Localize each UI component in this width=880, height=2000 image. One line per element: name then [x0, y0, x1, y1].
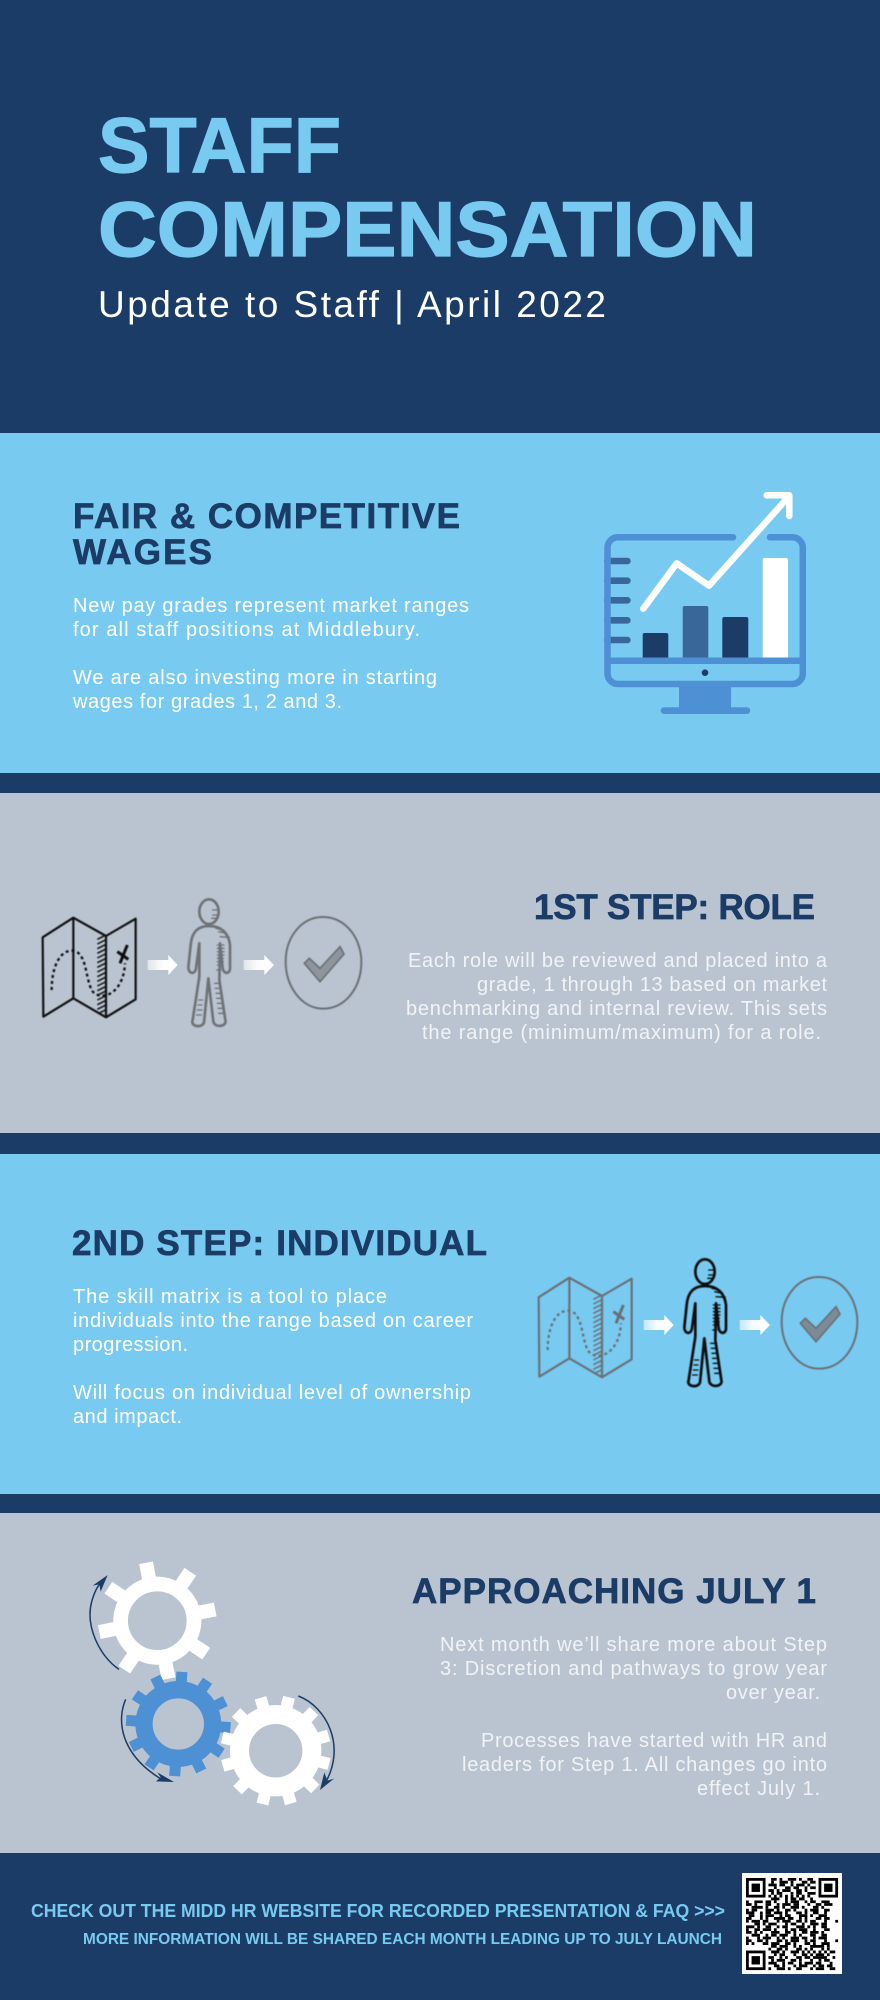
gear: middle blue — [126, 1671, 231, 1777]
panel: fair and competitive wages — [0, 433, 880, 773]
text block: next steps: Processes have started with HR and — [481, 1730, 827, 1752]
text block: pay grades: wages for grades 1, 2 and 3. — [72, 691, 342, 713]
icon: three gears — [90, 1561, 334, 1806]
text block: role review: grade, 1 through 13 based on market — [477, 974, 827, 996]
icon sequence: map, person, check — [539, 1259, 857, 1386]
text block: role review: the range (minimum/maximum) for a role. — [422, 1022, 821, 1044]
text block: role review: benchmarking and internal review. This sets — [406, 998, 827, 1020]
text block: skill matrix: and impact. — [73, 1406, 182, 1428]
heading: fair and competitive wages: FAIR & COMPETITIVE — [73, 497, 460, 536]
text block: pay grades: New pay grades represent market ranges — [73, 595, 469, 617]
icon: person outline — [188, 899, 230, 1026]
heading: fair and competitive wages — [73, 497, 460, 572]
arrows: gear rotation — [90, 1575, 334, 1790]
icon: treasure map — [43, 918, 136, 1017]
arrow: person to check — [740, 1315, 770, 1335]
text block: next steps: 3: Discretion and pathways to grow year — [440, 1658, 827, 1680]
text block: next steps: over year. — [726, 1682, 820, 1704]
text block: next steps — [440, 1634, 827, 1800]
panel: approaching july 1 — [0, 1513, 880, 1853]
icon: monitor with rising chart — [604, 495, 803, 714]
text block: next steps: effect July 1. — [697, 1778, 820, 1800]
arrow: person to check — [244, 955, 274, 975]
text block: skill matrix: The skill matrix is a tool to place — [73, 1286, 387, 1308]
callout: monthly information: MORE INFORMATION WILL BE SHARED EACH MONTH LEADING UP TO JULY LAUNCH — [83, 1931, 722, 1948]
panel: title header — [98, 101, 757, 325]
callout: website link: CHECK OUT THE MIDD HR WEBSITE FOR RECORDED PRESENTATION & FAQ >>> — [31, 1901, 725, 1921]
text block: next steps: Next month we’ll share more about Step — [440, 1634, 827, 1656]
text block: role review — [406, 950, 828, 1044]
icon: person outline — [684, 1259, 726, 1386]
text block: role review: Each role will be reviewed and placed into a — [408, 950, 828, 972]
arrow: map to person — [644, 1315, 674, 1335]
text block: pay grades: We are also investing more in starting — [73, 667, 437, 689]
text block: pay grades: for all staff positions at Middlebury. — [73, 619, 420, 641]
icon: QR code — [742, 1873, 842, 1974]
text block: skill matrix: progression. — [73, 1334, 188, 1356]
subtitle: Update to Staff | April 2022 — [98, 284, 606, 325]
heading: approaching july 1: APPROACHING JULY 1 — [412, 1572, 816, 1611]
arrow: map to person — [148, 955, 178, 975]
text block: skill matrix: individuals into the range based on career — [73, 1310, 473, 1332]
icon sequence: map, person, check — [43, 899, 361, 1026]
icon: treasure map — [539, 1278, 632, 1377]
icon: check mark in circle — [286, 917, 361, 1009]
gear: top white — [98, 1561, 217, 1680]
heading: 1st step role: 1ST STEP: ROLE — [534, 888, 815, 927]
title: COMPENSATION — [98, 185, 757, 273]
panel: footer — [31, 1873, 842, 1974]
heading: fair and competitive wages: WAGES — [73, 533, 212, 572]
text block: skill matrix: Will focus on individual level of ownership — [73, 1382, 471, 1404]
heading: 2nd step individual: 2ND STEP: INDIVIDUAL — [72, 1224, 487, 1263]
title: STAFF — [98, 101, 341, 189]
gear: right white — [221, 1696, 331, 1806]
icon: check mark in circle — [782, 1277, 857, 1369]
text block: next steps: leaders for Step 1. All changes go into — [462, 1754, 827, 1776]
text block: pay grades — [72, 595, 469, 713]
panel: 2nd step individual — [0, 1154, 880, 1494]
title — [98, 101, 757, 273]
panel: 1st step role — [0, 793, 880, 1133]
text block: skill matrix — [73, 1286, 473, 1428]
